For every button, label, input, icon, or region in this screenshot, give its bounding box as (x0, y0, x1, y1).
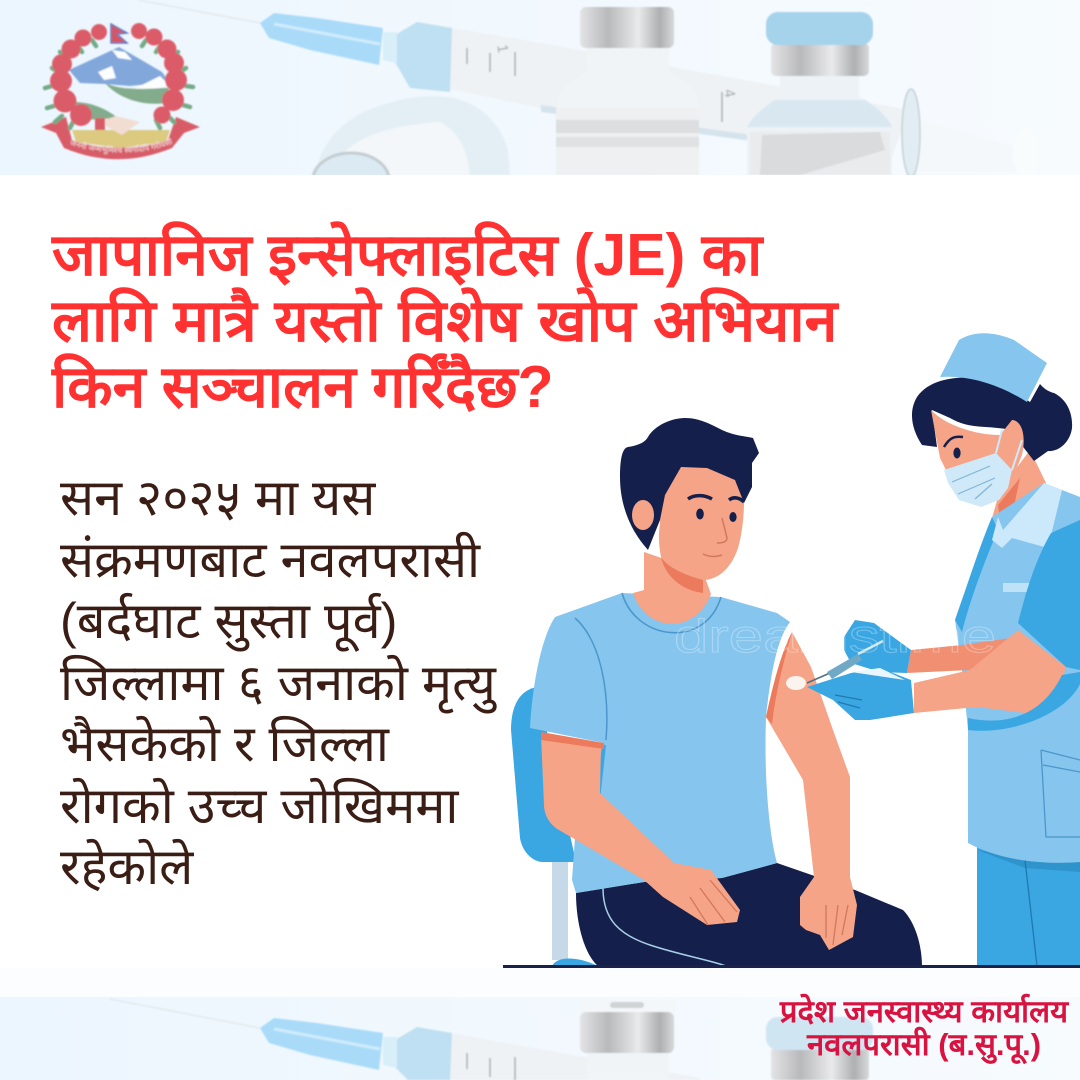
upper glove (844, 620, 911, 673)
man's hair (620, 418, 759, 550)
man's resting arm (541, 735, 740, 925)
nurse badge (1003, 583, 1031, 592)
man's face (659, 450, 748, 580)
nurse collar (992, 483, 1062, 548)
nurse cap (940, 333, 1047, 402)
rhododendron wreath (50, 23, 187, 126)
nurse pocket (1041, 750, 1080, 837)
nurse neck (990, 450, 1046, 545)
body text: (बर्दघाट सुस्ता पूर्व) (60, 592, 397, 649)
flag (111, 24, 127, 43)
mountain (69, 47, 169, 86)
body text: संक्रमणबाट नवलपरासी (60, 530, 480, 588)
nurse face mask (944, 430, 1022, 507)
watermark (674, 593, 996, 662)
footer: issuing office (779, 994, 1070, 1064)
top banner: vaccine vials and syringe: 4 (720, 88, 738, 99)
wreath leaves (45, 40, 193, 128)
cotton swab (786, 676, 806, 690)
ribbon motto: जननी जन्मभूमिश्च स्वर्गादपि गरीयसी (70, 137, 173, 156)
lower glove (807, 668, 914, 720)
ribbon (41, 117, 200, 159)
body text: सन २०२५ मा यस (60, 469, 375, 526)
top banner: vaccine vials and syringe: 1 (493, 43, 511, 54)
ground line (503, 965, 1080, 968)
body text: भैसकेको र जिल्ला (60, 715, 389, 772)
man's trousers (576, 863, 922, 966)
illustration: nurse vaccinating seated man (503, 333, 1080, 968)
handshake (98, 116, 140, 135)
nurse uniform (955, 483, 1080, 863)
man's neck (633, 552, 711, 624)
title (51, 221, 840, 420)
title: लागि मात्रै यस्तो विशेष खोप अभियान (52, 288, 837, 354)
finger lines (690, 880, 848, 945)
laurel base (72, 130, 170, 148)
man's t-shirt (530, 593, 790, 893)
nurse sleeve (1018, 520, 1080, 670)
title: किन सञ्चालन गर्रिँदैछ? (52, 354, 554, 420)
man's injected arm (766, 632, 857, 950)
nurse hair (912, 377, 1072, 461)
footer: issuing office: प्रदेश जनस्वास्थ्य कार्यालय (780, 994, 1068, 1029)
man's eyes, brows and smile (688, 496, 744, 556)
nurse trousers (977, 845, 1080, 966)
green hills (74, 83, 169, 120)
body text: जिल्लामा ६ जनाको मृत्यु (60, 654, 496, 710)
nurse upper arm skin (907, 637, 1040, 673)
syringe (807, 641, 883, 683)
body text: रहेकोले (60, 838, 193, 895)
icon: Nepal government emblem (40, 22, 200, 160)
body text (60, 469, 497, 895)
chair (511, 687, 598, 966)
nurse brow and eye (944, 437, 963, 458)
bottom banner: vaccine vials and syringe (0, 997, 1076, 1080)
footer: issuing office: नवलपरासी (ब.सु.पू.) (807, 1027, 1041, 1062)
body text: रोगको उच्च जोखिममा (60, 776, 458, 834)
title: जापानिज इन्सेफ्लाइटिस (JE) का (52, 222, 762, 288)
man's ear (632, 500, 654, 530)
nurse face (931, 410, 1024, 485)
watermark: dreamstime (674, 610, 996, 662)
top banner: vaccine vials and syringe (0, 0, 1076, 175)
